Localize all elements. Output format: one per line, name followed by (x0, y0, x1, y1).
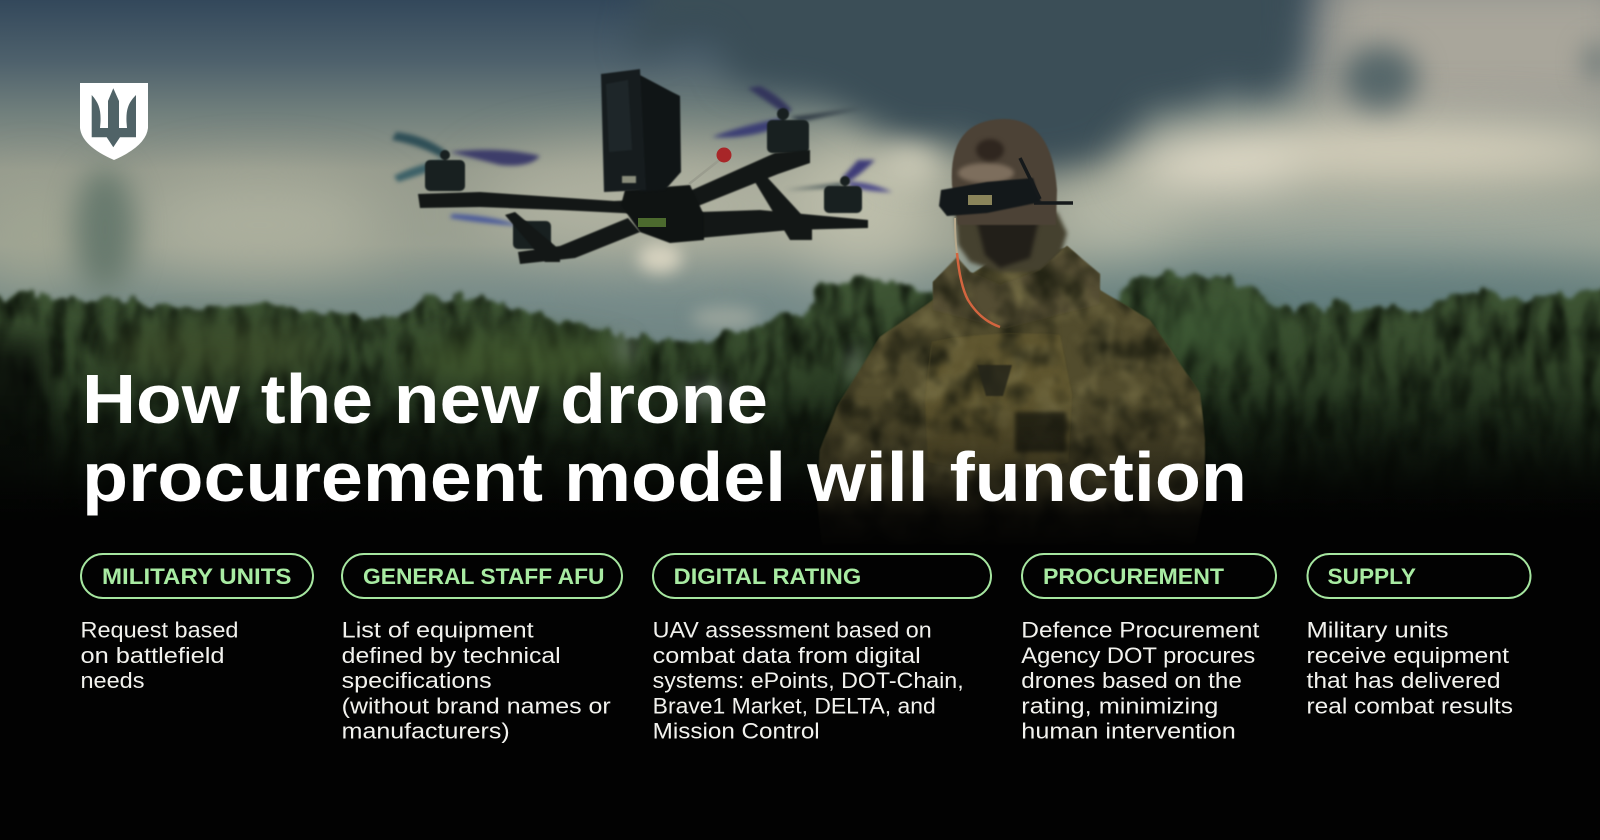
text: digital rating (653, 618, 964, 744)
soldier with FPV goggles (817, 119, 1205, 545)
propellers (392, 86, 892, 226)
title: How the new drone (82, 360, 768, 438)
FPV drone (392, 69, 892, 264)
text: procurement: rating, minimizing (1021, 694, 1218, 718)
logo: trident shield (80, 83, 148, 160)
heading: military units: MILITARY UNITS (102, 564, 292, 589)
panel: general staff (342, 554, 622, 744)
red antenna tip (689, 148, 732, 184)
panel: procurement (1021, 554, 1276, 744)
heading: supply: SUPPLY (1328, 564, 1416, 589)
title (82, 360, 1247, 516)
text: digital rating: Mission Control (653, 719, 820, 744)
text: procurement (1021, 618, 1259, 744)
title: procurement model will function (82, 438, 1247, 516)
background photo: tree line (0, 267, 1600, 528)
text: general staff (342, 618, 611, 744)
heading: digital rating: DIGITAL RATING (674, 564, 861, 589)
text: general staff: List of equipment (342, 618, 534, 642)
text: supply (1306, 618, 1513, 718)
collar (933, 246, 1100, 328)
central body (621, 185, 704, 243)
heading: procurement: PROCUREMENT (1043, 564, 1225, 589)
text: supply: real combat results (1306, 694, 1513, 718)
text: procurement: Defence Procurement (1021, 618, 1259, 642)
text: supply: Military units (1306, 618, 1448, 642)
battery pack (601, 69, 681, 192)
panel: digital rating (653, 554, 991, 744)
torso and jacket (817, 248, 1205, 545)
green board (638, 218, 666, 227)
text: digital rating: combat data from digital (653, 643, 921, 668)
text: digital rating: UAV assessment based on (653, 618, 932, 642)
text: military units: on battlefield (80, 643, 224, 668)
motors (425, 108, 862, 249)
text: military units (80, 618, 238, 693)
text: digital rating: systems: ePoints, DOT-Chain, (653, 668, 964, 693)
heading: procurement (1022, 554, 1276, 598)
orange cable (955, 218, 1000, 327)
head (952, 119, 1057, 225)
background photo: stormy sky (0, 0, 1600, 346)
text: general staff: manufacturers) (342, 719, 510, 744)
FPV goggles (939, 178, 1041, 216)
bottom fade to black (0, 395, 1600, 840)
dark storm cloud (640, 0, 1300, 175)
text: military units: needs (80, 668, 144, 693)
heading: general staff (342, 554, 622, 598)
heading: digital rating (653, 554, 991, 598)
text: digital rating: Brave1 Market, DELTA, and (653, 694, 936, 718)
text: supply: that has delivered (1306, 668, 1500, 693)
text: procurement: drones based on the (1021, 668, 1242, 693)
frame arms and struts (418, 150, 868, 264)
panel: military units (80, 554, 313, 693)
panel: supply (1306, 554, 1530, 718)
text: military units: Request based (80, 618, 238, 642)
heading: supply (1308, 554, 1530, 598)
heading: military units (81, 554, 313, 598)
plate carrier (925, 334, 1072, 470)
text: general staff: specifications (342, 668, 492, 693)
text: general staff: defined by technical (342, 643, 561, 668)
text: general staff: (without brand names or (342, 694, 611, 718)
neck gaiter (955, 212, 1067, 272)
text: procurement: Agency DOT procures (1021, 643, 1255, 668)
heading: general staff: GENERAL STAFF AFU (363, 564, 604, 589)
text: supply: receive equipment (1306, 643, 1509, 668)
text: procurement: human intervention (1021, 719, 1236, 744)
